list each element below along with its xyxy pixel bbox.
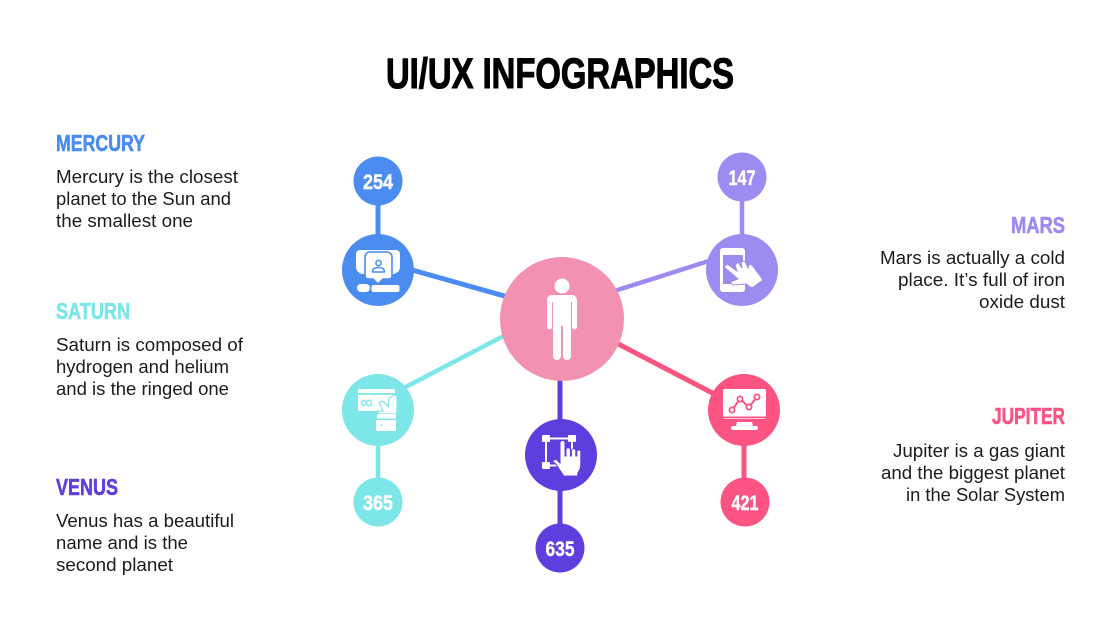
icon: selection and hand xyxy=(542,435,581,476)
node: Mars number: 147 xyxy=(728,167,756,190)
icon: card and hand xyxy=(358,389,397,431)
icon: monitor with chart xyxy=(723,389,766,430)
text block: Jupiter xyxy=(881,403,1065,505)
text block: Venus xyxy=(56,474,234,575)
node: Jupiter number xyxy=(720,478,770,526)
text block: Venus: name and is the xyxy=(56,533,188,553)
text block: Mercury xyxy=(56,130,238,231)
icon: user profile chat xyxy=(356,250,400,292)
node: Mercury number: 254 xyxy=(363,171,393,194)
connector: Mercury xyxy=(378,181,515,299)
text block: Mars: MARS xyxy=(1011,212,1065,238)
text block: Mercury: Mercury is the closest xyxy=(56,167,238,187)
text block: Mercury: planet to the Sun and xyxy=(56,189,231,209)
connector: Saturn xyxy=(378,330,515,502)
node: Mercury number xyxy=(354,156,402,206)
connector: Mars xyxy=(605,177,742,294)
text block: Jupiter: and the biggest planet xyxy=(881,463,1065,483)
text block: Mercury: the smallest one xyxy=(56,211,193,231)
icon: person xyxy=(547,278,577,360)
text block: Venus: VENUS xyxy=(56,474,118,500)
node: Venus number: 635 xyxy=(546,538,575,561)
node: Venus icon xyxy=(525,419,597,491)
central node: person xyxy=(500,257,624,381)
icon: phone and hand xyxy=(720,248,763,292)
node: Jupiter icon xyxy=(708,374,780,446)
connector: Jupiter xyxy=(605,337,744,502)
text block: Jupiter: in the Solar System xyxy=(906,485,1065,505)
connector: Venus xyxy=(558,370,562,548)
text block: Mercury: MERCURY xyxy=(56,130,145,156)
text block: Venus: Venus has a beautiful xyxy=(56,511,234,531)
text block: Mars xyxy=(880,212,1065,312)
node: Mars number xyxy=(718,152,766,202)
node: Saturn number: 365 xyxy=(363,492,393,515)
node: Mars icon xyxy=(706,234,778,306)
node: Venus number xyxy=(536,524,584,572)
text block: Saturn: hydrogen and helium xyxy=(56,357,229,377)
text block: Mars: place. It’s full of iron xyxy=(898,270,1065,290)
title: UI/UX INFOGRAPHICS xyxy=(386,50,734,98)
text block: Mars: Mars is actually a cold xyxy=(880,248,1065,268)
node: Saturn number xyxy=(354,478,402,526)
text block: Jupiter: JUPITER xyxy=(992,403,1065,429)
text block: Saturn: Saturn is composed of xyxy=(56,335,244,355)
text block: Saturn: and is the ringed one xyxy=(56,379,229,399)
text block: Saturn: SATURN xyxy=(56,298,130,324)
node: Saturn icon xyxy=(342,374,414,446)
text block: Jupiter: Jupiter is a gas giant xyxy=(893,441,1065,461)
text block: Venus: second planet xyxy=(56,555,173,575)
node: Mercury icon xyxy=(342,234,414,306)
text block: Saturn xyxy=(56,298,244,399)
text block: Mars: oxide dust xyxy=(979,292,1065,312)
node: Jupiter number: 421 xyxy=(732,492,759,515)
